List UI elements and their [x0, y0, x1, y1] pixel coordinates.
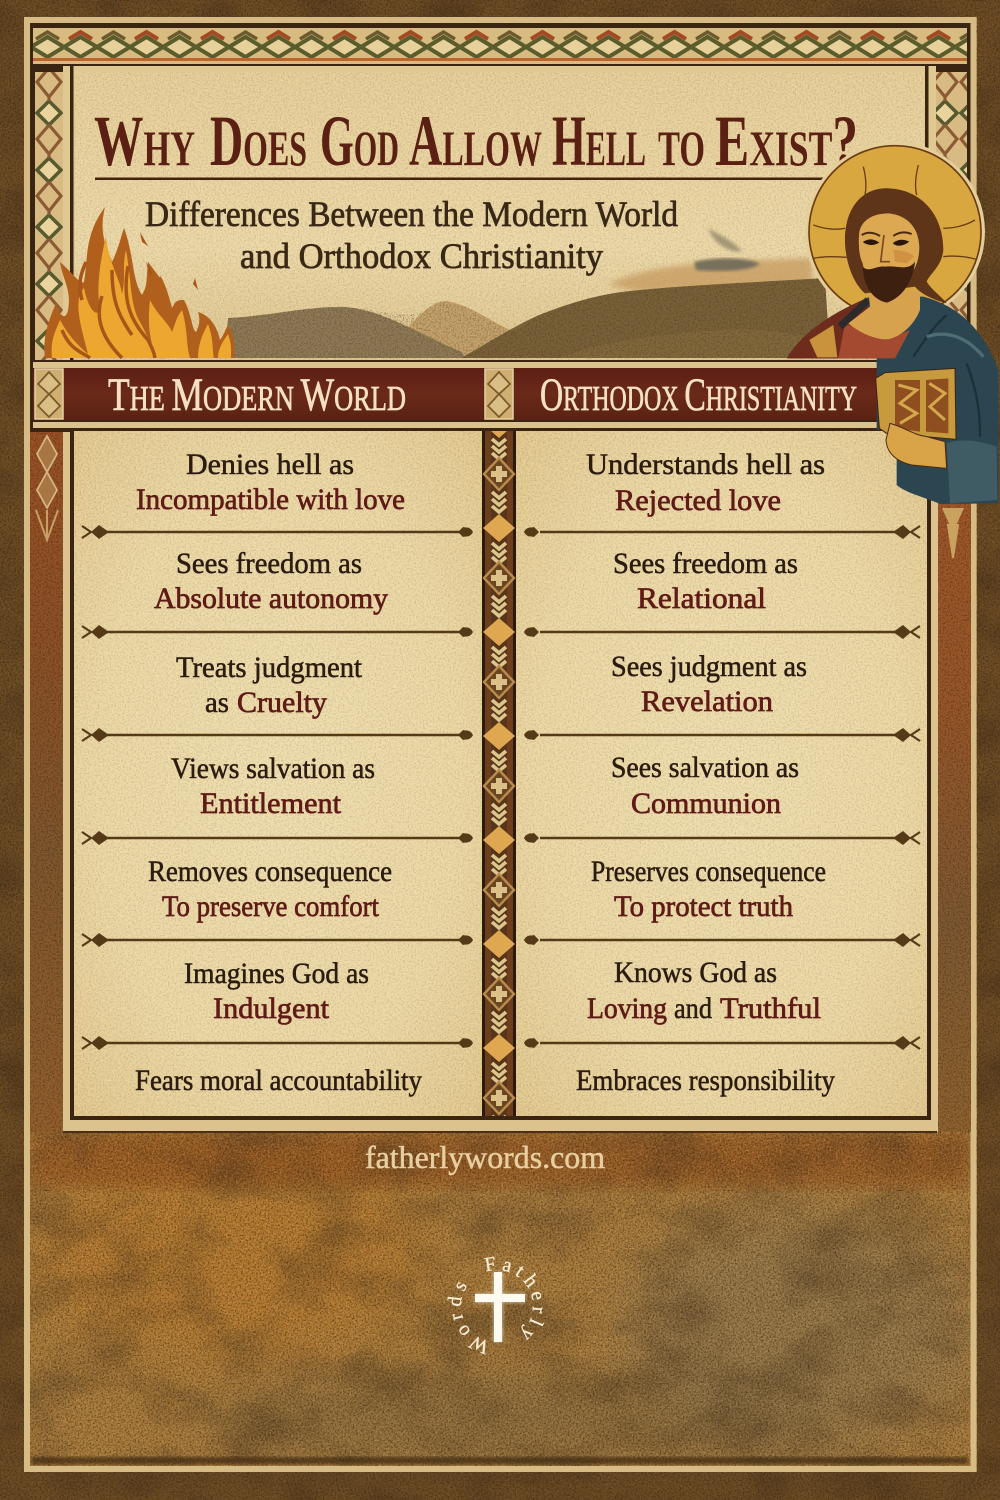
row: god: Truthful: [720, 992, 821, 1025]
left side column: [30, 432, 74, 1132]
logo: fatherly words cross: [447, 1256, 544, 1355]
title rule: [95, 178, 832, 180]
icon: centre band ornament: [485, 369, 513, 419]
title: HELL: [552, 101, 646, 181]
row: hell: Incompatible with love: [136, 483, 405, 516]
table bottom rule: [63, 1116, 937, 1133]
logo text: Words: Words: [447, 1282, 486, 1355]
top lattice border: [33, 28, 967, 64]
icon: flames: [44, 207, 235, 358]
logo text: Fatherly: Fatherly: [484, 1256, 544, 1340]
panel texture: [74, 431, 927, 1117]
row: freedom: [154, 547, 388, 615]
row: freedom: Sees freedom as: [176, 547, 362, 580]
row: freedom: Relational: [637, 582, 766, 615]
row: freedom: [613, 547, 798, 615]
title: [94, 101, 858, 181]
row: hell: [136, 448, 405, 516]
row: consequence: Removes consequence: [148, 855, 392, 888]
row: judgment: [611, 650, 807, 718]
icon: hand: [886, 423, 947, 468]
column header band: [30, 360, 924, 432]
icon: christ icon figure with book: [787, 142, 998, 504]
right lattice border: [936, 72, 967, 362]
title: WHY: [94, 101, 195, 181]
row: hell: Denies hell as: [186, 448, 354, 481]
panel: modern world column: [74, 431, 482, 1117]
row: salvation: Views salvation as: [171, 752, 375, 785]
row: salvation: [171, 752, 375, 820]
centre ornamental strip: [482, 431, 516, 1117]
row: judgment: Treats judgment: [176, 651, 363, 684]
icon: face: [859, 213, 919, 303]
header panel: [63, 66, 936, 362]
left lattice border: [35, 72, 63, 362]
row: responsibility: Embraces responsibility: [576, 1064, 835, 1097]
row: salvation: [611, 751, 799, 820]
landscape hills: [225, 228, 830, 358]
title: GOD: [320, 101, 399, 181]
row: god: Indulgent: [213, 992, 330, 1025]
subtitle: [145, 194, 678, 276]
row: salvation: Sees salvation as: [611, 751, 799, 784]
right side column: [927, 432, 971, 1132]
subtitle: Differences Between the Modern World: [145, 194, 678, 234]
icon: left band ornament: [35, 369, 63, 419]
row: accountability: Fears moral accountability: [135, 1064, 422, 1097]
row: judgment: [176, 651, 363, 719]
row: god: Knows God as: [614, 956, 777, 989]
row: god: [184, 957, 369, 1025]
row: god: Loving: [587, 992, 667, 1025]
row: consequence: To protect truth: [614, 890, 793, 923]
title: DOES: [210, 101, 307, 181]
row: god: Imagines God as: [184, 957, 369, 990]
row: judgment: Sees judgment as: [611, 650, 807, 683]
heading: the modern world: THE MODERN WORLD: [108, 369, 406, 421]
row: hell: Rejected love: [615, 484, 781, 517]
icon: neck: [848, 290, 920, 339]
website url: fatherlywords.com: [365, 1139, 605, 1175]
panel: orthodox column: [516, 431, 927, 1117]
row: consequence: [148, 855, 392, 923]
modern world text rows: [135, 448, 422, 1097]
icon: halo: [805, 142, 985, 322]
title: TO: [658, 120, 705, 176]
icon: robe and tunic: [787, 297, 998, 504]
icon: open book: [876, 368, 956, 439]
row: freedom: Absolute autonomy: [154, 582, 388, 615]
row: consequence: To preserve comfort: [162, 890, 380, 923]
orthodox text rows: [576, 448, 835, 1097]
row: freedom: Sees freedom as: [613, 547, 798, 580]
row: salvation: Communion: [631, 787, 781, 820]
subtitle: and Orthodox Christianity: [240, 236, 603, 276]
row: salvation: Entitlement: [200, 787, 342, 820]
icon: cross: [475, 1272, 525, 1342]
heading: orthodox christianity: ORTHODOX CHRISTIANITY: [540, 369, 857, 421]
row: consequence: Preserves consequence: [591, 855, 826, 888]
row: judgment: Cruelty: [237, 686, 327, 719]
row: judgment: as: [205, 686, 229, 719]
title: ALLOW: [409, 101, 542, 181]
row: god: [587, 956, 821, 1025]
row: god: and: [674, 992, 712, 1025]
row dividers: [82, 525, 920, 1050]
icon: hair: [845, 188, 947, 303]
row: hell: [586, 448, 825, 517]
row: hell: Understands hell as: [586, 448, 825, 481]
title: EXIST?: [715, 101, 858, 181]
row: judgment: Revelation: [641, 685, 773, 718]
row: consequence: [591, 855, 826, 923]
